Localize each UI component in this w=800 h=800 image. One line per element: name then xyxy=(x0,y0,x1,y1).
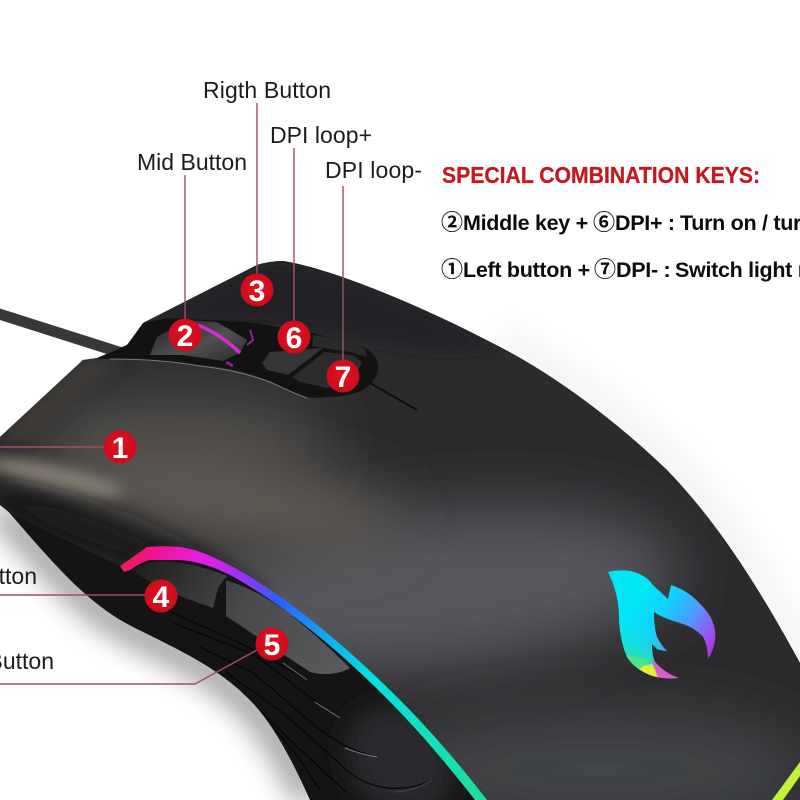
scroll wheel xyxy=(150,320,253,366)
button recess xyxy=(97,318,378,398)
RGB strip right xyxy=(772,762,800,800)
marker 6 xyxy=(278,320,310,355)
marker 7: 7 xyxy=(335,361,351,394)
slot xyxy=(370,383,417,410)
label: DPI loop minus: DPI loop- xyxy=(325,157,422,183)
RGB light strip xyxy=(120,546,487,800)
leader lines xyxy=(0,103,343,684)
flame logo xyxy=(608,570,716,678)
label: right button: Rigth Button xyxy=(203,77,331,103)
label: mid button: Mid Button xyxy=(137,149,247,175)
side buttons xyxy=(132,562,350,674)
DPI plus button xyxy=(262,348,323,375)
marker 1: 1 xyxy=(112,432,128,465)
combination: left button and DPI minus: ⑦ xyxy=(594,252,616,284)
cable xyxy=(0,313,125,354)
marker 4: 4 xyxy=(153,581,170,614)
combination: middle key and DPI plus: DPI+ : xyxy=(615,211,675,235)
grip shading xyxy=(167,610,477,800)
marker 5: 5 xyxy=(264,629,280,662)
label: DPI loop plus: DPI loop+ xyxy=(270,122,372,148)
combination: middle key and DPI plus: ② xyxy=(441,205,463,237)
wheel light xyxy=(198,325,240,353)
marker 2: 2 xyxy=(177,320,193,353)
heading: special combination keys: SPECIAL COMBINATION KEYS: xyxy=(442,162,760,188)
recess edge highlight xyxy=(110,359,307,398)
marker 3 xyxy=(240,274,274,308)
DPI minus button xyxy=(292,352,362,388)
marker 1 xyxy=(104,430,136,465)
combination: left button and DPI minus: Left button + xyxy=(463,258,590,282)
marker 7 xyxy=(326,360,360,394)
soft shadow xyxy=(0,340,800,800)
combination: middle key and DPI plus: ⑥ xyxy=(593,205,615,237)
combination: left button and DPI minus: ① xyxy=(441,252,463,284)
combination: left button and DPI minus: DPI- : xyxy=(616,258,670,282)
marker 2 xyxy=(168,318,202,353)
marker 3: 3 xyxy=(249,275,265,308)
marker 4 xyxy=(144,580,178,614)
marker 6: 6 xyxy=(286,322,302,355)
top shell shading xyxy=(0,250,800,800)
mouse xyxy=(0,250,800,800)
upper gloss piece xyxy=(312,335,367,357)
mouse body xyxy=(0,261,800,800)
combination: middle key and DPI plus: Middle key + xyxy=(463,211,588,235)
marker 5 xyxy=(256,628,288,662)
